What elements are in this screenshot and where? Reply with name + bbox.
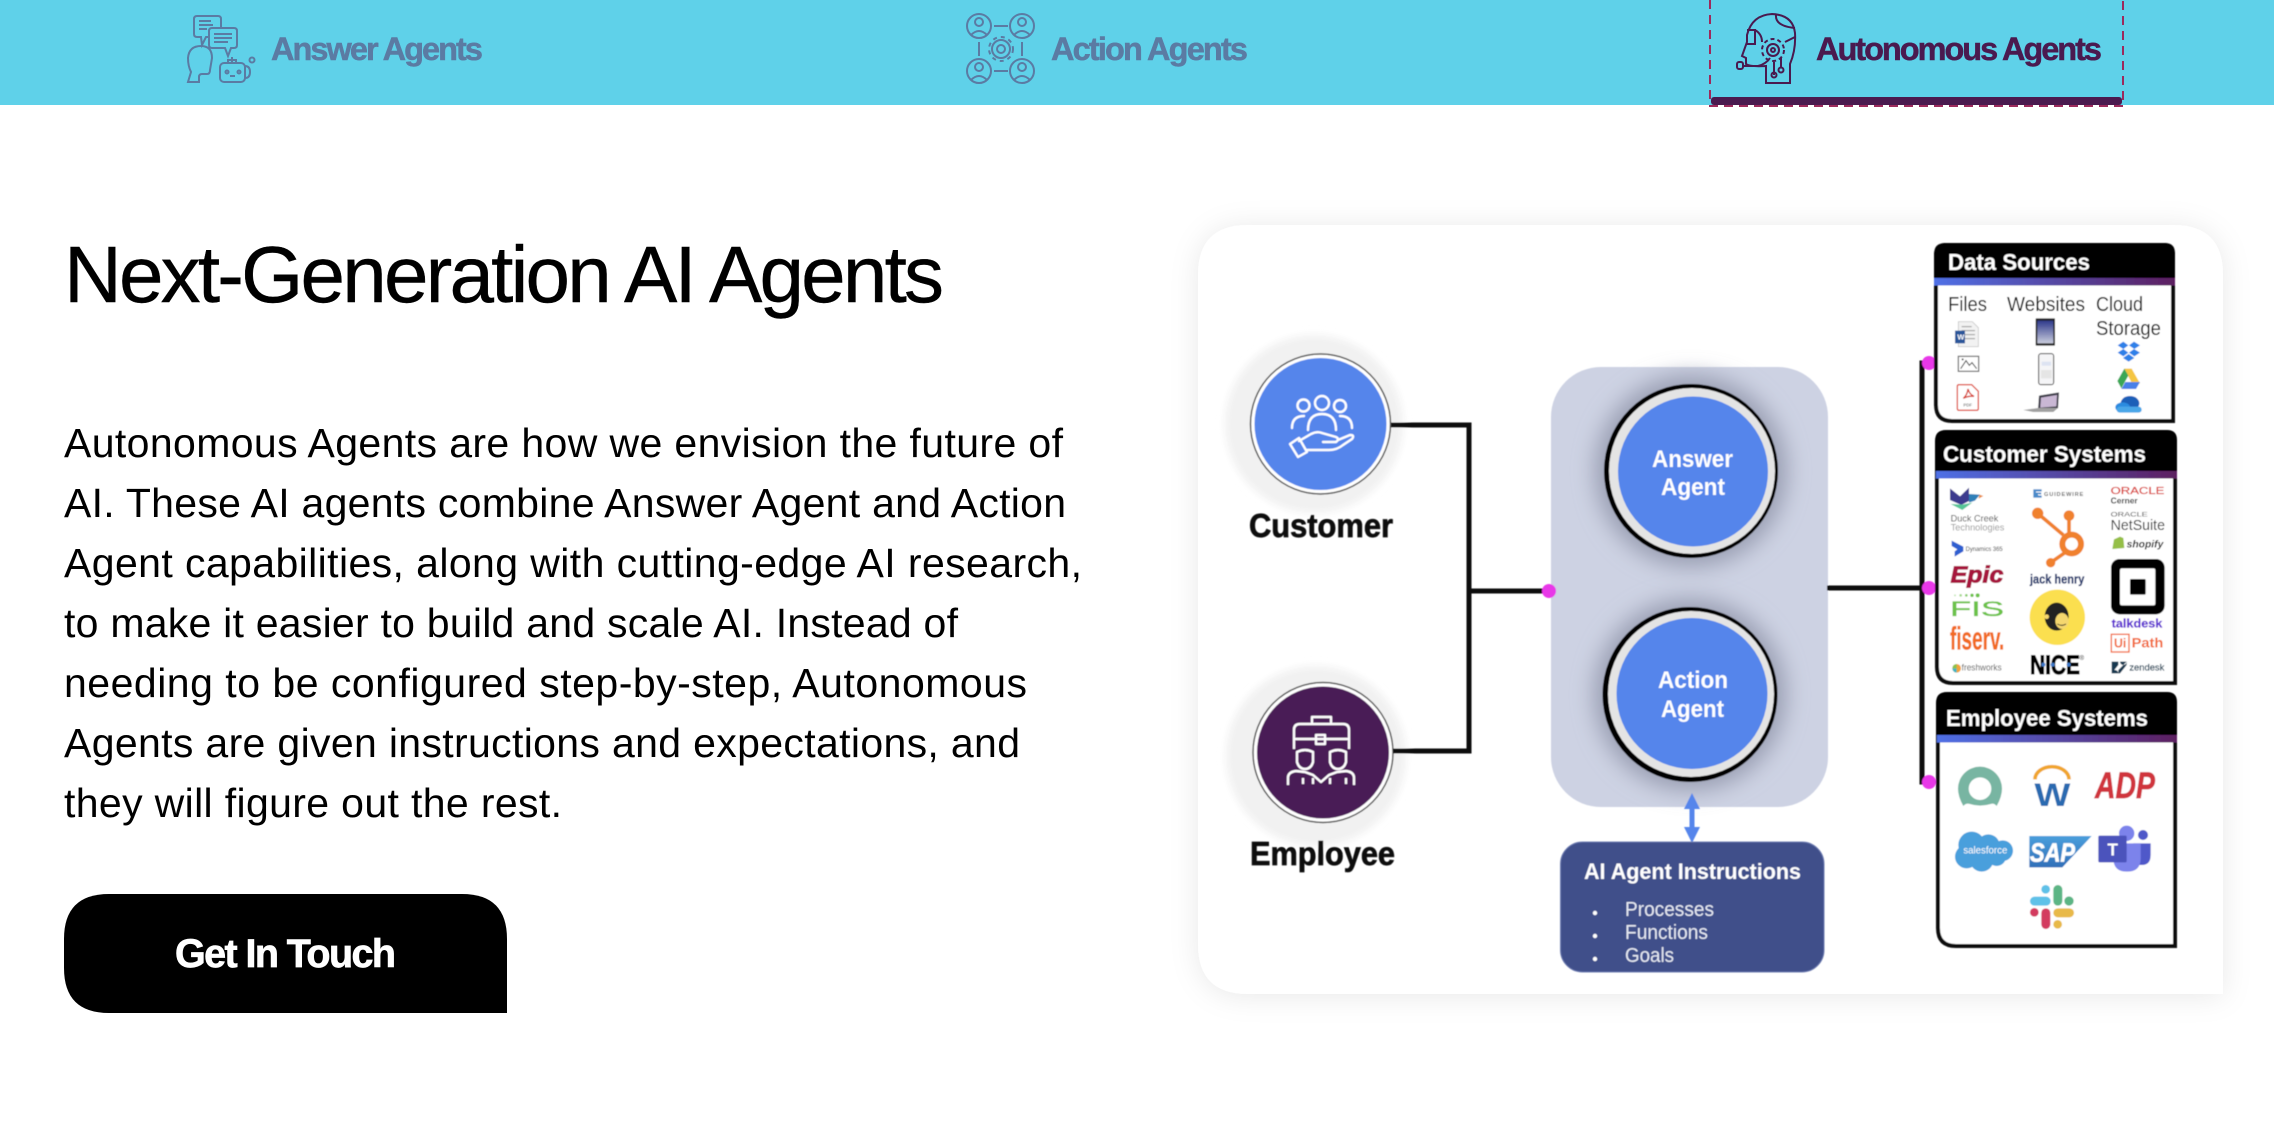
logo: ADP: ADP: [2094, 764, 2155, 806]
node: Answer Agent: Answer: [1652, 446, 1733, 473]
icon: chat bubbles, person and robot: [188, 16, 254, 82]
label: Autonomous Agents: Autonomous Agents: [1816, 31, 2102, 67]
icon: phone: [2039, 354, 2054, 385]
logo: UiPath: [2111, 634, 2163, 652]
connector dots: [1542, 356, 1936, 789]
logo: Oracle Cerner: Cerner: [2111, 495, 2138, 505]
panel: Customer Systems: [1935, 430, 2177, 683]
logo: fiserv: fiserv.: [1950, 620, 2004, 656]
connectors: agents to systems: [1827, 363, 1929, 782]
node: Action Agent: Agent: [1661, 696, 1724, 723]
icon: AI head with headset: [1737, 14, 1795, 83]
panel: Employee Systems: [1936, 692, 2177, 946]
panel: Data Sources: Storage: [2096, 318, 2161, 340]
logo: jack henry: jack henry: [2029, 572, 2084, 586]
logo: Oracle Cerner: [2111, 486, 2165, 505]
logo: Microsoft Teams: [2098, 826, 2151, 872]
logo: Epic: Epic: [1951, 561, 2003, 587]
logo: talkdesk: talkdesk: [2112, 617, 2163, 631]
card background: [1198, 225, 2223, 994]
logo: Salesforce: salesforce: [1963, 845, 2007, 856]
panel: AI Agent Instructions: Processes: [1625, 899, 1714, 921]
logo: Workday: W: [2034, 776, 2071, 813]
panel: AI Agent Instructions: Goals: [1625, 945, 1674, 967]
panel: AI Agent Instructions: Functions: [1625, 922, 1708, 944]
body paragraph: Agents are given instructions and expectations, and: [64, 720, 1020, 766]
logo: Zendesk: [2112, 662, 2165, 673]
tab: Autonomous Agents (selected): [1710, 0, 2123, 106]
icon: tablet: [2036, 318, 2055, 346]
selection bar: [1711, 97, 2122, 105]
label: Answer Agents: Answer Agents: [271, 31, 483, 67]
logo: UiPath: Path: [2132, 635, 2163, 651]
icon: OneDrive: [2115, 396, 2142, 413]
body paragraph: to make it easier to build and scale AI. Instead of: [64, 600, 959, 646]
logo: Oracle NetSuite: NetSuite: [2111, 518, 2165, 534]
panel: Data Sources: Websites: [2007, 294, 2085, 316]
logo: NICE: NICE: [2030, 650, 2080, 680]
icon: PDF file: [1957, 385, 1978, 410]
logo: green ring: [1958, 767, 2002, 806]
panel: Customer Systems: Customer Systems: [1943, 441, 2146, 467]
logo: Dynamics 365: [1952, 541, 2003, 557]
icon: Word file: W: [1957, 332, 1964, 341]
logo: Slack: [2030, 885, 2074, 929]
body paragraph: Agent capabilities, along with cutting-edge AI research,: [64, 540, 1082, 586]
logo: FIS: FIS: [1950, 597, 2004, 621]
logo: Workday: [2034, 767, 2071, 813]
tab: Action Agents: [967, 14, 1248, 83]
body paragraph: needing to be configured step-by-step, Autonomous: [64, 660, 1027, 706]
arrow: agents to instructions: [1684, 793, 1700, 843]
icon: Dropbox: [2118, 342, 2140, 362]
icon: image file: [1958, 356, 1979, 371]
body paragraph: they will figure out the rest.: [64, 780, 562, 826]
panel: Data Sources: [1934, 243, 2175, 423]
label: Action Agents: Action Agents: [1051, 31, 1248, 67]
logo: Duck Creek Technologies: Technologies: [1951, 523, 2005, 533]
panel: AI Agent Instructions: [1560, 842, 1824, 972]
panel: Data Sources: Cloud: [2096, 294, 2143, 316]
logo: Dynamics 365: Dynamics 365: [1966, 546, 2003, 553]
tab: Answer Agents: [188, 16, 483, 82]
node: Action Agent: Action: [1658, 667, 1728, 694]
node: Answer Agent: Agent: [1661, 474, 1725, 501]
logo: SAP: SAP: [2030, 837, 2076, 867]
logo: Oracle Cerner: ORACLE: [2111, 486, 2165, 497]
icon: PDF file: PDF: [1963, 403, 1972, 408]
connectors: users to agents: [1391, 425, 1549, 751]
logo: Shopify: shopify: [2127, 539, 2164, 550]
logo: Zendesk: zendesk: [2129, 663, 2165, 673]
logo: Mailchimp: [2030, 590, 2085, 645]
logo: Guidewire: [2033, 489, 2084, 498]
body paragraph: [64, 420, 1082, 826]
label: Employee: Employee: [1250, 835, 1395, 872]
icon: laptop: [2023, 392, 2059, 412]
panel: Data Sources: Data Sources: [1948, 249, 2090, 275]
panel: Employee Systems: Employee Systems: [1946, 705, 2148, 731]
body paragraph: Autonomous Agents are how we envision the future of: [64, 420, 1064, 466]
selection outline: [1710, 0, 2123, 106]
icon: briefcase over two people: [1288, 717, 1354, 785]
panel: Data Sources: Files: [1948, 294, 1987, 316]
panel: architecture diagram: [1198, 225, 2223, 994]
logo: Shopify: [2112, 537, 2164, 550]
icon: Google Drive: [2117, 369, 2140, 389]
logo: Oracle NetSuite: [2111, 512, 2165, 534]
logo: Square: [2111, 559, 2165, 614]
logo: Guidewire: GUIDEWIRE: [2044, 492, 2084, 498]
title: Next-Generation AI Agents: [64, 230, 944, 319]
icon: people around a gear: [967, 14, 1034, 83]
node: Employee: [1226, 666, 1406, 872]
icon: people over a hand: [1290, 396, 1353, 457]
button: Get In Touch: [64, 894, 507, 1013]
button: Get In Touch: Get In Touch: [175, 932, 396, 976]
logo: Oracle NetSuite: ORACLE: [2111, 512, 2148, 519]
logo: Microsoft Teams: T: [2107, 839, 2118, 859]
logo: Duck Creek Technologies: Duck Creek: [1951, 514, 1999, 524]
logo: FIS: [1950, 593, 2004, 621]
logo: freshworks: freshworks: [1962, 663, 2002, 673]
logo: Duck Creek Technologies: [1950, 488, 2005, 533]
navigation bar: [0, 0, 2274, 106]
logo: HubSpot: [2032, 508, 2081, 567]
panel: agents: [1551, 367, 1828, 807]
icon: Word file: [1955, 322, 1978, 347]
logo: NICE: ®: [2080, 655, 2085, 662]
logo: UiPath: Ui: [2114, 636, 2126, 651]
node: Answer Agent: [1595, 375, 1787, 567]
node: Action Agent: [1594, 598, 1786, 790]
label: Customer: Customer: [1249, 507, 1393, 544]
panel: AI Agent Instructions: AI Agent Instructions: [1584, 859, 1801, 884]
node: Customer: [1225, 335, 1403, 544]
logo: Salesforce: [1955, 832, 2013, 872]
body paragraph: AI. These AI agents combine Answer Agent and Action: [64, 480, 1066, 526]
